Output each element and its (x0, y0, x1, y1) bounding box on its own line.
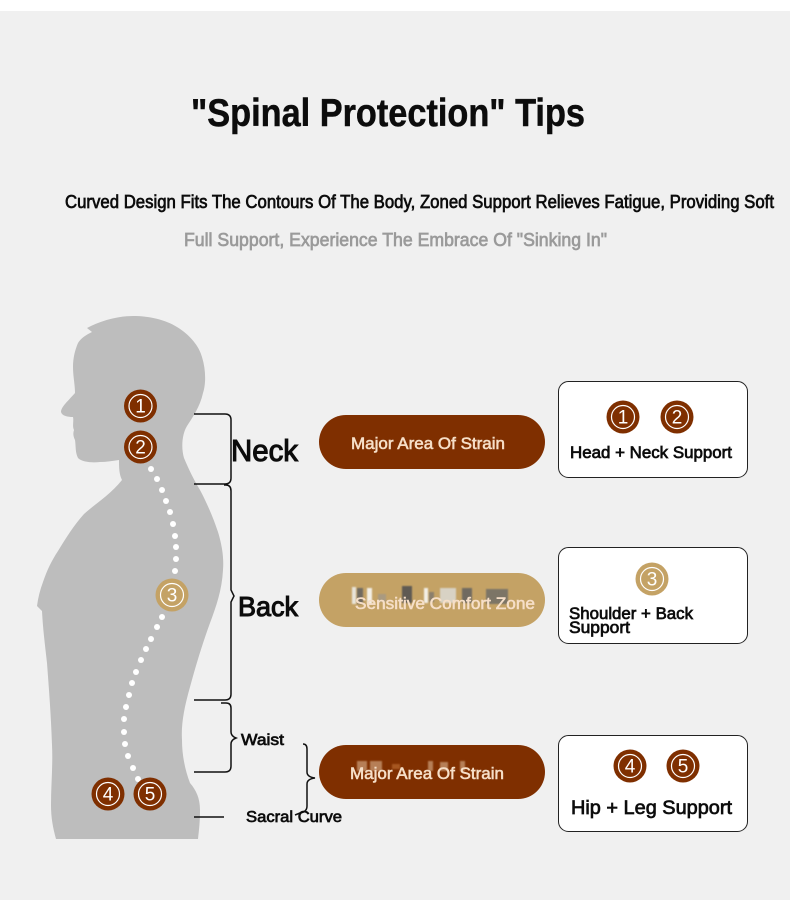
marker 3 on body: 3 (167, 586, 177, 606)
marker 3 on body (156, 578, 188, 612)
card text: Shoulder + Back (569, 605, 694, 623)
marker 1 on body (124, 390, 157, 422)
pill: major area of strain, neck (319, 415, 545, 469)
pill: major area of strain, hip (319, 745, 545, 799)
label: waist: Waist (241, 732, 285, 749)
marker 1 on body: 1 (135, 396, 146, 418)
pill: major area of strain, hip: Major Area Of Strain (350, 765, 504, 783)
label: neck: Neck (231, 433, 298, 468)
title: "Spinal Protection" Tips (191, 92, 585, 135)
pill: sensitive comfort zone (319, 573, 545, 627)
pill: sensitive comfort zone: Sensitive Comfort Zone (355, 595, 535, 613)
label: sacral curve: Sacral Curve (246, 809, 342, 826)
card marker 4: 4 (625, 756, 636, 778)
card marker 1: 1 (618, 408, 628, 428)
card marker 5 (666, 750, 700, 782)
sacral curve tick (194, 816, 224, 818)
card: head and neck support (558, 382, 748, 478)
marker 2 on body (124, 430, 157, 464)
card marker 2: 2 (672, 408, 682, 428)
card text (569, 605, 694, 637)
marker 5 on body: 5 (145, 784, 155, 806)
waist bracket (194, 703, 236, 772)
pill: major area of strain, neck: Major Area Of Strain (351, 435, 505, 453)
card: shoulder and back support (558, 548, 748, 644)
card marker 1 (606, 400, 640, 434)
card text: Head + Neck Support (570, 444, 732, 462)
back bracket (194, 485, 234, 700)
neck bracket (194, 414, 231, 484)
marker 4 on body: 4 (103, 784, 114, 806)
spine dots (121, 466, 179, 782)
card text: Hip + Leg Support (571, 797, 733, 819)
card: hip and leg support (558, 736, 748, 832)
subtitle line 2: Full Support, Experience The Embrace Of "Sinking In" (184, 229, 607, 250)
marker 2 on body: 2 (135, 438, 146, 458)
card marker 4 (614, 750, 646, 782)
body silhouette (37, 316, 223, 839)
card marker 5: 5 (678, 756, 688, 778)
hip bracket (295, 744, 315, 815)
card marker 2 (660, 400, 694, 434)
marker 4 on body (92, 778, 124, 810)
card marker 3 (636, 562, 668, 596)
card marker 3: 3 (647, 570, 657, 590)
card text: Support (569, 619, 630, 637)
marker 5 on body (134, 778, 166, 810)
label: back: Back (238, 591, 299, 622)
